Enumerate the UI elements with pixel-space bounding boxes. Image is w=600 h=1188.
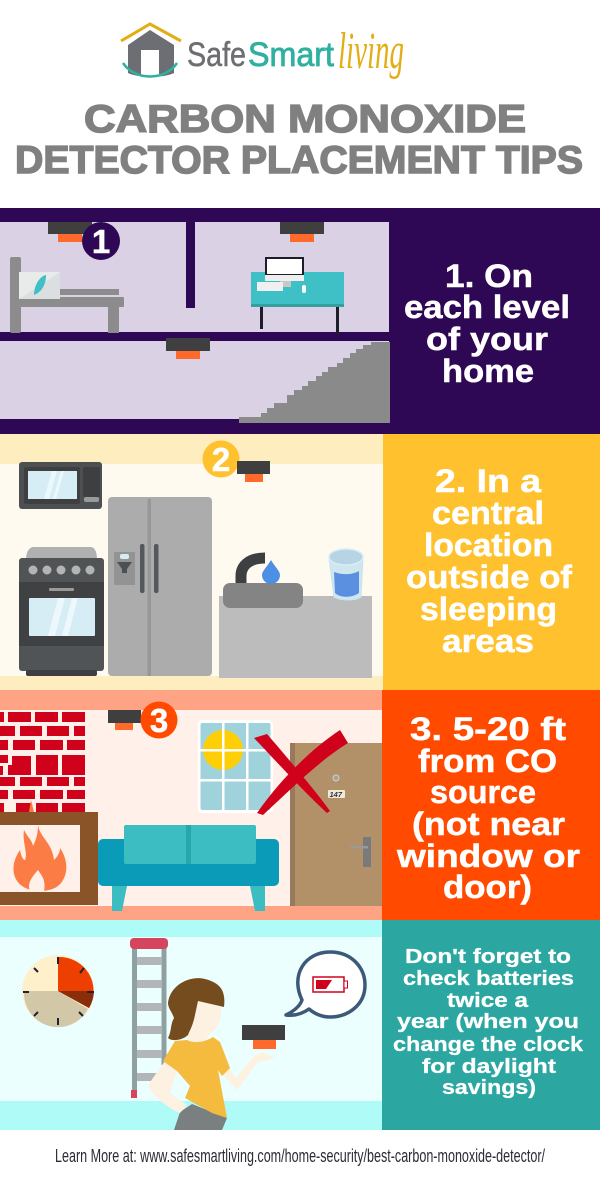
- text: battery reminder: [393, 946, 584, 1099]
- icon: staircase: [239, 342, 390, 423]
- title: [15, 98, 583, 182]
- text: tip 3: source: [430, 774, 536, 810]
- icon: refrigerator: [108, 497, 212, 676]
- text: battery reminder: savings): [442, 1077, 536, 1099]
- text: battery reminder: change the clock: [393, 1034, 584, 1056]
- icon: bed: [10, 257, 124, 333]
- title: CARBON MONOXIDE: [84, 98, 526, 141]
- icon: house: [121, 24, 181, 77]
- text: tip 1: of your: [426, 321, 548, 357]
- icon: ladder: [130, 938, 168, 1098]
- number badge 2: [202, 440, 240, 478]
- text: battery reminder: for daylight: [422, 1056, 556, 1078]
- icon: window with sun: [198, 720, 273, 813]
- title: DETECTOR PLACEMENT TIPS: [15, 139, 583, 182]
- text: tip 1: home: [442, 353, 534, 389]
- speech bubble with low battery: [286, 952, 365, 1017]
- text: tip 2: [406, 463, 572, 659]
- text: tip 3: (not near: [412, 806, 565, 842]
- panel 3: living room: [0, 690, 600, 920]
- panel 4: batteries: [0, 920, 600, 1130]
- text: tip 3: from CO: [418, 743, 557, 779]
- text: tip 2: 2. In a: [435, 463, 541, 499]
- text: tip 2: outside of: [406, 559, 572, 595]
- icon: woman holding detector: [148, 978, 276, 1130]
- number badge 3: 3: [150, 702, 168, 739]
- panel 2: kitchen: [0, 434, 600, 690]
- detector: upper left: [48, 222, 92, 242]
- lower floor room: [0, 341, 389, 419]
- icon: clock: [22, 955, 94, 1027]
- icon: door: [290, 743, 382, 906]
- text: tip 3: 3. 5-20 ft: [410, 711, 566, 747]
- text: battery reminder: year (when you: [397, 1011, 579, 1033]
- text: tip 3: [396, 711, 580, 905]
- text: battery reminder: check batteries: [403, 968, 574, 990]
- detector: living room: [108, 710, 141, 730]
- number badge 1: [82, 222, 120, 260]
- text: battery reminder: Don't forget to: [405, 946, 571, 968]
- logo: SafeSmart living: Smart: [248, 36, 335, 74]
- upper floor room: [0, 222, 389, 332]
- icon: door: 147: [330, 790, 343, 799]
- icon: red X: [254, 730, 348, 815]
- number badge 2: 2: [212, 441, 230, 478]
- text: tip 2: location: [424, 527, 553, 563]
- logo: SafeSmart living: [121, 23, 404, 80]
- text: tip 1: [404, 258, 570, 389]
- text: battery reminder: twice a: [447, 990, 529, 1012]
- panel 1: each level: [0, 208, 600, 434]
- icon: fireplace with flame: [0, 800, 98, 905]
- text: tip 2: sleeping: [420, 591, 557, 627]
- icon: brick wall: [0, 712, 85, 812]
- number badge 1: 1: [92, 223, 110, 260]
- detector: lower floor: [166, 338, 210, 359]
- icon: desk with computer: [251, 258, 344, 335]
- detector: upper right: [280, 222, 324, 242]
- icon: stove: [19, 547, 104, 676]
- number badge 3: [140, 702, 178, 739]
- icon: glass of water: [329, 549, 363, 600]
- logo wordmark: Safe: [187, 36, 246, 74]
- icon: sofa: [98, 825, 279, 911]
- text: tip 3: window or: [396, 838, 580, 874]
- logo: SafeSmart living: living: [338, 23, 404, 80]
- icon: counter and sink: [219, 558, 372, 678]
- text: tip 1: 1. On: [445, 258, 533, 294]
- detector: in hand: [242, 1025, 285, 1049]
- text: tip 1: each level: [404, 289, 570, 325]
- text: tip 2: areas: [442, 623, 534, 659]
- text: tip 3: door): [443, 869, 532, 905]
- icon: microwave: [19, 462, 102, 509]
- text: tip 2: central: [432, 495, 544, 531]
- detector: kitchen: [237, 461, 270, 482]
